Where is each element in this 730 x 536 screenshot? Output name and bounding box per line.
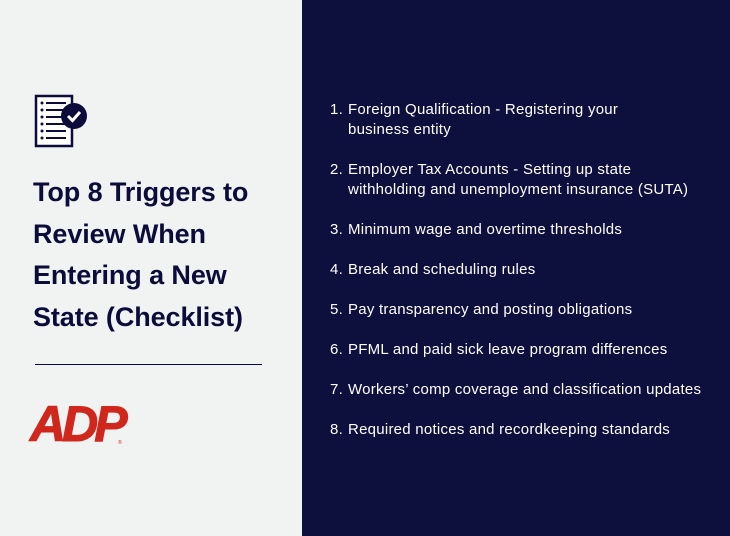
item 5: Pay transparency and posting obligations [348,301,632,318]
item 2 [330,161,688,198]
title: State (Checklist) [33,302,243,332]
title [33,177,248,332]
item 1: Foreign Qualification - Registering your [348,101,618,118]
panel: left [0,0,302,536]
panel: checklist [302,0,730,536]
item 3: Minimum wage and overtime thresholds [348,221,622,238]
item 7: Workers’ comp coverage and classification updates [348,381,701,398]
logo: ADP: ® [118,439,122,446]
item 1: 1. [330,101,343,118]
item 8: 8. [330,421,343,438]
icon: checklist [34,94,87,148]
item 6: 6. [330,341,343,358]
item 4: Break and scheduling rules [348,261,535,278]
title: Top 8 Triggers to [33,177,248,207]
item 2: 2. [330,161,343,178]
item 5: 5. [330,301,343,318]
item 2: Employer Tax Accounts - Setting up state [348,161,631,178]
item 6: PFML and paid sick leave program differences [348,341,668,358]
item 1 [330,101,618,138]
title: Review When [33,218,206,248]
item 7: 7. [330,381,343,398]
item 4: 4. [330,261,343,278]
item 3: 3. [330,221,343,238]
item 8: Required notices and recordkeeping standards [348,421,670,438]
item 2: withholding and unemployment insurance (SUTA) [348,181,688,198]
item 1: business entity [348,121,451,138]
title: Entering a New [33,260,227,290]
